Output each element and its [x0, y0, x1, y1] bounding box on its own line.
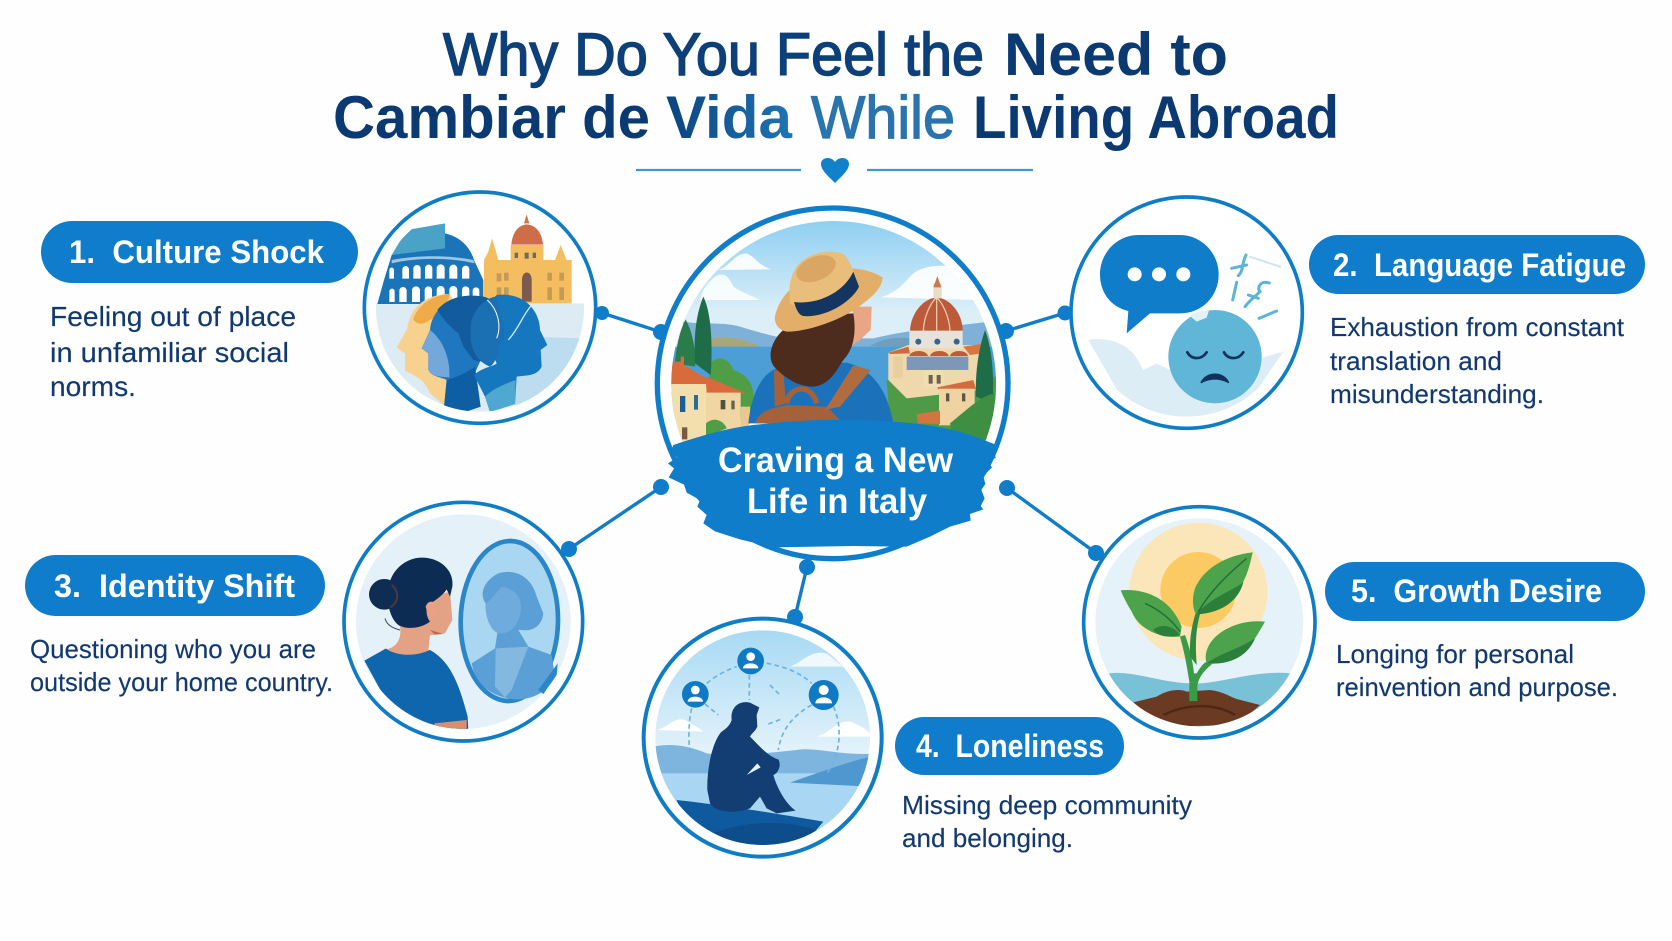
- title: Why Do You Feel the: [443, 21, 984, 88]
- item 4: loneliness: [895, 717, 1192, 853]
- description 2: Exhaustion from constant: [1330, 312, 1625, 342]
- pill 4: 4. Loneliness: [916, 728, 1104, 764]
- title divider with heart: [636, 158, 1033, 183]
- pill 1: [41, 221, 358, 283]
- item 1: culture shock: [41, 221, 358, 402]
- description 1: Feeling out of place: [50, 301, 296, 332]
- item 2: language fatigue: [1309, 235, 1645, 409]
- description 2: translation and: [1330, 346, 1502, 376]
- pill 3: [25, 555, 325, 616]
- pill 5: [1325, 562, 1645, 621]
- circle 3: identity shift illustration: [344, 502, 583, 741]
- circle 4: loneliness illustration: [644, 619, 882, 857]
- title: Vida: [666, 84, 793, 151]
- pill 4: [895, 717, 1124, 775]
- connectors: [561, 306, 1104, 625]
- circle 1: culture shock illustration: [364, 192, 596, 423]
- community icons: [682, 648, 839, 710]
- description 3: Questioning who you are: [30, 634, 316, 664]
- title: Cambiar de: [333, 84, 650, 151]
- circle 2: language fatigue illustration: [1071, 197, 1302, 428]
- description 3: outside your home country.: [30, 667, 333, 697]
- description 2: misunderstanding.: [1330, 379, 1544, 409]
- banner text: [718, 441, 954, 521]
- description 1: [50, 301, 296, 402]
- description 5: [1336, 639, 1618, 702]
- traveler figure: [748, 250, 893, 423]
- item 5: growth desire: [1325, 562, 1645, 702]
- description 5: reinvention and purpose.: [1336, 672, 1618, 702]
- central illustration: traveler in Italy: [657, 208, 1008, 559]
- title: While: [811, 84, 955, 151]
- pill 5: 5. Growth Desire: [1351, 573, 1602, 609]
- description 1: in unfamiliar social: [50, 337, 289, 368]
- pill 3: 3. Identity Shift: [54, 568, 295, 604]
- central banner: [668, 420, 999, 547]
- description 3: [30, 634, 333, 697]
- description 4: and belonging.: [902, 823, 1073, 853]
- circle 5: growth desire illustration: [1084, 507, 1315, 738]
- description 4: Missing deep community: [902, 790, 1192, 820]
- banner text: Craving a New: [718, 441, 954, 480]
- scribbled letters: [1232, 255, 1280, 318]
- title: Living Abroad: [973, 84, 1339, 151]
- title: Need to: [1004, 21, 1228, 88]
- description 2: [1330, 312, 1625, 409]
- banner text: Life in Italy: [747, 482, 928, 521]
- description 4: [902, 790, 1192, 853]
- pill 2: 2. Language Fatigue: [1333, 247, 1626, 283]
- item 3: identity shift: [25, 555, 333, 697]
- pill 2: [1309, 235, 1645, 294]
- pill 1: 1. Culture Shock: [69, 234, 324, 270]
- title: [333, 21, 1339, 151]
- description 5: Longing for personal: [1336, 639, 1574, 669]
- description 1: norms.: [50, 371, 136, 402]
